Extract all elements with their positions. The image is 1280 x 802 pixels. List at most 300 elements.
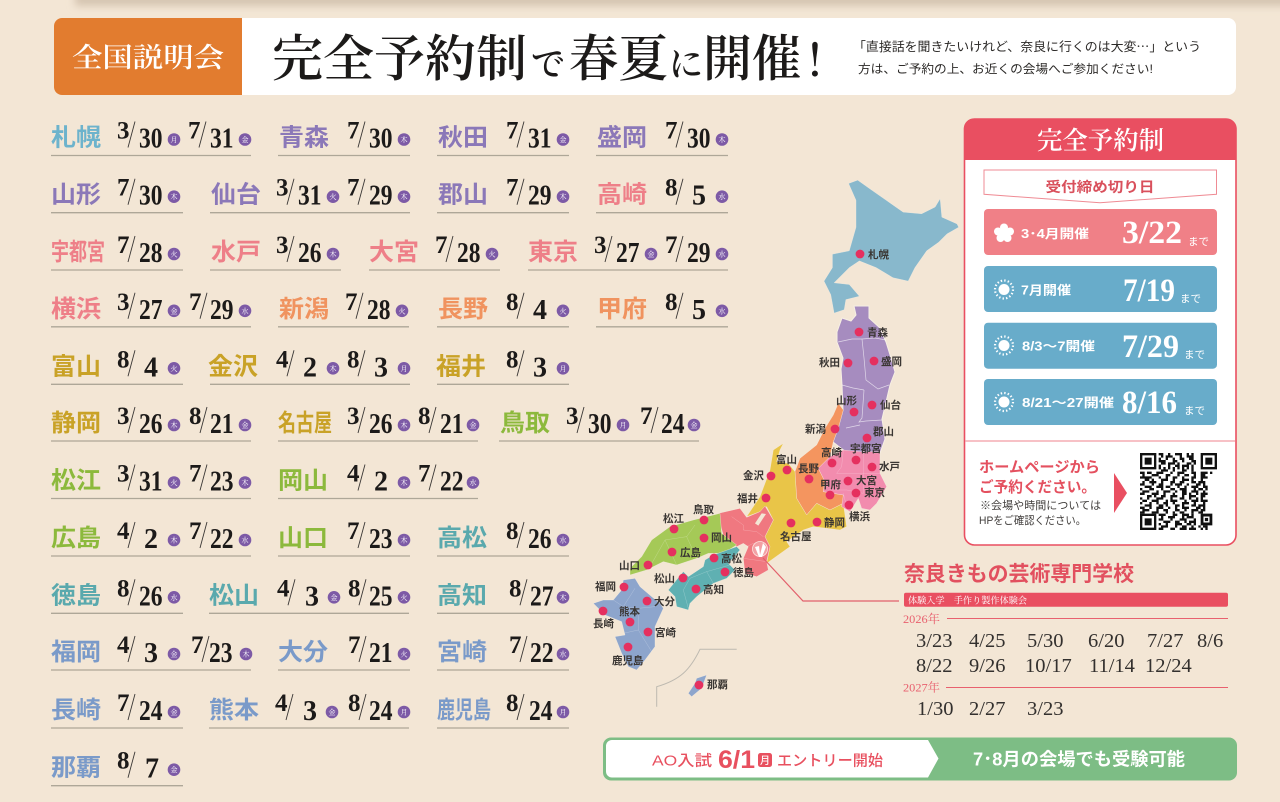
QR code xyxy=(1140,454,1216,529)
鳥取: 24 xyxy=(661,409,684,440)
徳島: 徳島 xyxy=(51,582,101,609)
札幌: 金 xyxy=(242,135,248,145)
deadline: March April: 3･4月開催 xyxy=(1021,226,1090,241)
deadline: August first: まで xyxy=(1184,349,1205,361)
city labels: 長崎 xyxy=(593,617,614,630)
熊本: 月 xyxy=(400,708,408,718)
宮崎: 水 xyxy=(560,650,566,660)
鳥取: 金 xyxy=(690,420,698,430)
city labels: 松江 xyxy=(663,512,684,525)
熊本: 8 xyxy=(348,690,360,717)
高知: 8 xyxy=(509,575,522,602)
icon: flower xyxy=(994,224,1014,242)
city labels: 宇都宮 xyxy=(850,442,882,455)
dates 2026: 4/25 xyxy=(969,630,1005,652)
city labels: 新潟 xyxy=(805,422,826,436)
岡山: 7 xyxy=(418,460,430,488)
盛岡: 30 xyxy=(687,124,710,154)
city labels: 長野 xyxy=(798,462,819,475)
AO entry text: エントリー開始 xyxy=(777,752,883,770)
city labels: 札幌 xyxy=(868,248,889,261)
静岡: 金 xyxy=(242,420,248,430)
Hokkaido xyxy=(824,180,959,313)
名古屋: 名古屋 xyxy=(278,410,332,437)
岡山 xyxy=(278,460,479,498)
city labels: 大宮 xyxy=(856,474,877,487)
東京: 3 xyxy=(594,232,606,259)
dates 2026: 9/26 xyxy=(969,655,1005,677)
盛岡: 7 xyxy=(665,118,678,144)
名古屋: 木 xyxy=(400,420,408,430)
仙台: 3 xyxy=(276,175,288,202)
header banner xyxy=(54,18,1236,95)
長崎 xyxy=(51,690,183,728)
水戸: 3 xyxy=(276,232,288,259)
header note: 方は、ご予約の上、お近くの会場へご参加ください! xyxy=(858,61,1153,76)
鳥取 xyxy=(499,403,700,441)
deadline: August second: 8/16 xyxy=(1122,385,1177,421)
仙台: 7 xyxy=(347,175,360,202)
dates 2027: 3/23 xyxy=(1027,698,1063,720)
長野: 火 xyxy=(560,306,566,316)
那覇 xyxy=(51,748,183,786)
松江: 木 xyxy=(242,478,248,488)
大宮: 大宮 xyxy=(369,239,419,266)
deadline: August first xyxy=(984,323,1217,369)
高崎 xyxy=(596,175,728,213)
長野 xyxy=(437,289,569,327)
仙台: 31 xyxy=(298,181,322,212)
松山: 25 xyxy=(369,581,392,612)
名古屋: 金 xyxy=(470,420,476,430)
city labels: 金沢 xyxy=(743,469,764,482)
福井: 3 xyxy=(533,352,547,383)
名古屋: 21 xyxy=(440,409,464,440)
福井: 月 xyxy=(560,364,566,374)
静岡: 木 xyxy=(170,420,178,430)
AO entry text: AO入試 xyxy=(652,752,712,770)
dates 2026: 8/6 xyxy=(1197,630,1223,652)
宇都宮: 7 xyxy=(117,232,130,259)
city labels: 福岡 xyxy=(595,580,616,593)
甲府: 8 xyxy=(665,289,678,316)
高知 xyxy=(437,575,569,613)
横浜 xyxy=(51,289,251,327)
札幌 xyxy=(51,118,251,156)
高崎: 8 xyxy=(665,175,678,202)
福岡: 7 xyxy=(191,632,204,659)
広島: 22 xyxy=(210,524,234,555)
deadline: August second xyxy=(984,379,1217,425)
year 2026: 2026年 xyxy=(903,611,940,626)
広島: 7 xyxy=(189,518,202,545)
宇都宮 xyxy=(51,232,183,270)
山口 xyxy=(278,518,410,556)
仙台 xyxy=(210,175,410,213)
広島: 木 xyxy=(170,536,178,546)
city dots xyxy=(599,250,878,689)
広島: 水 xyxy=(242,536,248,546)
鹿児島: 月 xyxy=(560,708,566,718)
city labels: 横浜 xyxy=(849,510,870,523)
福岡: 3 xyxy=(144,638,158,669)
静岡: 26 xyxy=(139,409,162,440)
金沢: 木 xyxy=(330,364,336,374)
長野: 長野 xyxy=(438,296,488,323)
秋田: 秋田 xyxy=(438,124,488,152)
横浜: 7 xyxy=(189,289,202,316)
dates 2026: 8/22 xyxy=(916,655,952,677)
city labels: 高崎 xyxy=(821,446,842,459)
宇都宮: 火 xyxy=(170,250,178,260)
大宮: 7 xyxy=(435,232,448,259)
school name: 奈良きもの芸術専門学校 xyxy=(904,562,1134,586)
city labels: 山形 xyxy=(836,395,857,407)
東京: 29 xyxy=(687,238,710,269)
Nara marker xyxy=(752,542,768,557)
静岡: 静岡 xyxy=(51,410,101,437)
名古屋 xyxy=(278,403,479,441)
甲府: 水 xyxy=(718,306,726,316)
deadline: July: 7月開催 xyxy=(1021,282,1072,298)
city labels: 甲府 xyxy=(820,479,841,491)
icon: sun xyxy=(995,280,1013,298)
福岡: 福岡 xyxy=(51,639,101,666)
新潟: 新潟 xyxy=(279,296,329,323)
東京: 水 xyxy=(718,250,726,260)
高崎: 5 xyxy=(692,181,706,212)
山口: 山口 xyxy=(278,525,328,552)
長崎: 金 xyxy=(170,708,178,718)
Chugoku xyxy=(630,513,737,575)
大分 xyxy=(278,632,410,670)
dates 2026: 6/20 xyxy=(1088,630,1124,652)
青森: 30 xyxy=(369,124,392,154)
秋田: 金 xyxy=(560,135,566,145)
静岡: 8 xyxy=(189,403,202,430)
金沢 xyxy=(208,346,410,384)
title xyxy=(272,31,848,87)
秋田: 7 xyxy=(506,118,518,144)
長崎: 24 xyxy=(139,696,162,727)
郡山: 郡山 xyxy=(438,182,488,209)
city labels: 鳥取 xyxy=(693,503,714,516)
金沢: 金沢 xyxy=(208,353,258,380)
dates 2026 xyxy=(916,630,1223,677)
Kanto xyxy=(818,450,887,512)
松山: 4 xyxy=(277,575,290,602)
高松: 水 xyxy=(560,536,566,546)
deadline: July: まで xyxy=(1180,293,1201,305)
宇都宮: 宇都宮 xyxy=(51,239,105,266)
city labels: 福井 xyxy=(737,492,758,505)
長野: 4 xyxy=(533,295,547,326)
札幌: 30 xyxy=(139,124,162,154)
header tag: 全国説明会: 全国説明会 xyxy=(72,43,224,73)
dates 2026: 11/14 xyxy=(1089,655,1135,677)
福岡: 金 xyxy=(170,650,178,660)
松江: 3 xyxy=(117,460,130,488)
新潟: 7 xyxy=(345,289,358,316)
鳥取: 30 xyxy=(588,409,612,440)
東京: 7 xyxy=(665,232,678,259)
水戸: 木 xyxy=(330,250,336,260)
鳥取: 7 xyxy=(640,403,652,430)
山口: 23 xyxy=(369,524,392,555)
dates 2026: 10/17 xyxy=(1025,655,1072,677)
松江: 23 xyxy=(210,466,234,498)
水戸: 水戸 xyxy=(211,239,261,266)
広島 xyxy=(51,518,251,556)
新潟: 火 xyxy=(398,306,406,316)
富山: 4 xyxy=(144,352,158,383)
郡山: 29 xyxy=(528,181,552,212)
松山: 火 xyxy=(400,593,408,603)
icon: sun xyxy=(995,336,1013,354)
city labels: 秋田 xyxy=(819,356,840,369)
高知: 27 xyxy=(530,581,554,612)
郡山: 木 xyxy=(560,192,566,202)
city labels: 松山 xyxy=(654,572,675,585)
盛岡 xyxy=(596,118,728,156)
city labels: 広島 xyxy=(680,546,701,559)
leader line to Nara xyxy=(763,558,899,601)
city labels: 水戸 xyxy=(879,460,900,473)
山口: 7 xyxy=(347,518,360,545)
静岡: 21 xyxy=(210,409,234,440)
秋田: 31 xyxy=(528,124,552,154)
鳥取: 鳥取 xyxy=(500,410,550,437)
city labels: 高知 xyxy=(703,583,724,596)
富山: 富山 xyxy=(51,353,101,380)
熊本: 熊本 xyxy=(209,697,259,724)
山形 xyxy=(51,175,183,213)
熊本: 24 xyxy=(369,696,392,727)
広島: 4 xyxy=(117,518,130,545)
宮崎: 22 xyxy=(530,638,554,669)
title: 春夏 xyxy=(569,31,668,87)
deadline: July: 7/19 xyxy=(1123,273,1175,309)
title: 完全予約制 xyxy=(272,31,527,87)
鹿児島: 鹿児島 xyxy=(437,697,491,724)
dates 2027: 2/27 xyxy=(969,698,1005,720)
city labels: 大分 xyxy=(654,595,675,608)
岡山: 4 xyxy=(347,460,360,488)
福岡: 23 xyxy=(209,638,232,669)
札幌: 札幌 xyxy=(51,124,101,152)
website call to action: ホームページから xyxy=(979,459,1100,476)
city labels: 盛岡 xyxy=(881,355,902,368)
秋田 xyxy=(437,118,569,156)
city labels: 岡山 xyxy=(711,532,732,544)
松江 xyxy=(51,460,251,498)
那覇: 7 xyxy=(145,754,159,785)
city labels: 鹿児島 xyxy=(612,654,644,667)
熊本: 4 xyxy=(275,690,288,717)
甲府: 甲府 xyxy=(597,296,647,323)
AO entry text: 6/1 xyxy=(718,746,755,774)
静岡: 3 xyxy=(117,403,130,430)
高知: 高知 xyxy=(437,582,487,609)
Tohoku borders xyxy=(838,338,889,428)
Kansai xyxy=(718,506,773,577)
高松: 8 xyxy=(506,518,518,545)
山形: 山形 xyxy=(51,182,101,209)
東京: 金 xyxy=(648,250,654,260)
金沢: 月 xyxy=(400,364,408,374)
header note xyxy=(853,36,1201,76)
徳島: 水 xyxy=(170,593,178,603)
静岡 xyxy=(51,403,251,441)
dates 2027 xyxy=(917,698,1063,720)
広島: 広島 xyxy=(51,525,101,552)
dates 2026: 7/27 xyxy=(1147,630,1183,652)
山形: 7 xyxy=(117,175,130,202)
松山: 3 xyxy=(305,581,319,612)
水戸: 26 xyxy=(298,238,322,269)
deadline: March April: まで xyxy=(1188,236,1209,248)
高松: 高松 xyxy=(437,525,487,552)
高崎: 高崎 xyxy=(597,182,647,209)
盛岡: 木 xyxy=(718,135,726,145)
仙台: 木 xyxy=(400,192,408,202)
鹿児島 xyxy=(437,690,569,728)
city labels: 熊本 xyxy=(619,605,640,618)
郡山 xyxy=(437,175,569,213)
岡山: 22 xyxy=(440,466,464,498)
甲府: 5 xyxy=(692,295,706,326)
大宮: 28 xyxy=(457,238,480,269)
金沢: 2 xyxy=(303,352,317,383)
event bar xyxy=(904,593,1228,607)
盛岡: 盛岡 xyxy=(597,124,647,152)
横浜: 27 xyxy=(139,295,162,326)
高崎: 水 xyxy=(718,192,726,202)
高松 xyxy=(437,518,569,556)
山口: 木 xyxy=(400,536,408,546)
富山 xyxy=(51,346,183,384)
大分: 火 xyxy=(400,650,408,660)
青森 xyxy=(278,118,410,156)
東京 xyxy=(528,232,728,270)
deadline: March April xyxy=(984,209,1217,255)
岡山: 木 xyxy=(400,478,408,488)
福岡 xyxy=(51,632,252,670)
金沢: 8 xyxy=(347,346,360,373)
札幌: 3 xyxy=(117,118,130,144)
event bar: 体験入学 手作り製作体験会 xyxy=(908,594,1027,606)
徳島 xyxy=(51,575,183,613)
panel: reservation xyxy=(964,118,1236,545)
deadline: August second: まで xyxy=(1184,405,1205,417)
札幌: 月 xyxy=(170,135,178,145)
横浜: 29 xyxy=(210,295,234,326)
宮崎: 7 xyxy=(509,632,522,659)
宮崎 xyxy=(437,632,569,670)
website call to action: HPをご確認ください。 xyxy=(979,513,1086,527)
金沢: 3 xyxy=(374,352,388,383)
横浜: 3 xyxy=(117,289,130,316)
札幌: 31 xyxy=(210,124,234,154)
大宮 xyxy=(369,232,500,270)
city labels: 青森 xyxy=(867,326,888,339)
arrow xyxy=(1114,473,1127,513)
長崎: 7 xyxy=(117,690,130,717)
岡山: 水 xyxy=(470,478,476,488)
横浜: 横浜 xyxy=(51,296,101,323)
city labels: 名古屋 xyxy=(780,530,812,543)
松江: 松江 xyxy=(51,468,101,494)
deadline ribbon xyxy=(984,170,1216,203)
山形: 木 xyxy=(170,192,178,202)
header note: 「直接話を聞きたいけれど、奈良に行くのは大変…」という xyxy=(853,36,1201,55)
名古屋: 26 xyxy=(369,409,392,440)
鳥取: 月 xyxy=(620,420,626,430)
富山: 8 xyxy=(117,346,130,373)
AO entry text: 月 xyxy=(760,755,770,767)
Nara school section xyxy=(903,562,1228,720)
甲府 xyxy=(596,289,728,327)
山形: 30 xyxy=(139,181,162,212)
仙台: 火 xyxy=(330,192,336,202)
AO entry text xyxy=(652,746,883,774)
水戸 xyxy=(210,232,341,270)
那覇: 8 xyxy=(117,748,130,775)
横浜: 水 xyxy=(242,306,248,316)
広島: 2 xyxy=(144,524,158,555)
金沢: 4 xyxy=(276,346,289,373)
deadline: March April: 3/22 xyxy=(1122,215,1182,251)
高知: 木 xyxy=(560,593,566,603)
deadline: July xyxy=(984,266,1217,312)
新潟: 28 xyxy=(367,295,390,326)
city labels xyxy=(593,248,902,691)
dates 2026: 3/23 xyxy=(916,630,952,652)
dates 2026: 5/30 xyxy=(1027,630,1063,652)
city labels: 高松 xyxy=(721,552,742,565)
札幌: 7 xyxy=(188,118,200,144)
松江: 火 xyxy=(170,478,178,488)
Tohoku xyxy=(833,306,895,453)
deadline ribbon: 受付締め切り日 xyxy=(1046,179,1154,195)
松山: 8 xyxy=(348,575,360,602)
city labels: 徳島 xyxy=(733,566,754,579)
大分: 大分 xyxy=(278,639,328,666)
大分: 7 xyxy=(348,632,360,659)
city labels: 仙台 xyxy=(880,398,901,412)
熊本: 3 xyxy=(303,696,317,727)
東京: 27 xyxy=(616,238,640,269)
熊本 xyxy=(209,690,410,728)
deadline: August first: 7/29 xyxy=(1122,329,1179,365)
横浜: 金 xyxy=(170,306,178,316)
福岡: 4 xyxy=(117,632,130,659)
dates 2027: 1/30 xyxy=(917,698,953,720)
website call to action: ご予約ください。 xyxy=(979,478,1096,496)
熊本: 金 xyxy=(328,708,336,718)
map of Japan xyxy=(593,180,959,707)
city labels: 那覇 xyxy=(707,678,728,691)
名古屋: 8 xyxy=(418,403,430,430)
header tag: 全国説明会 xyxy=(54,18,242,95)
Chubu xyxy=(747,443,847,563)
徳島: 26 xyxy=(139,581,162,612)
website call to action xyxy=(979,459,1101,527)
鹿児島: 8 xyxy=(506,690,518,717)
panel heading: 完全予約制 xyxy=(1037,127,1164,155)
新潟 xyxy=(278,289,409,327)
city labels: 東京 xyxy=(864,486,885,499)
